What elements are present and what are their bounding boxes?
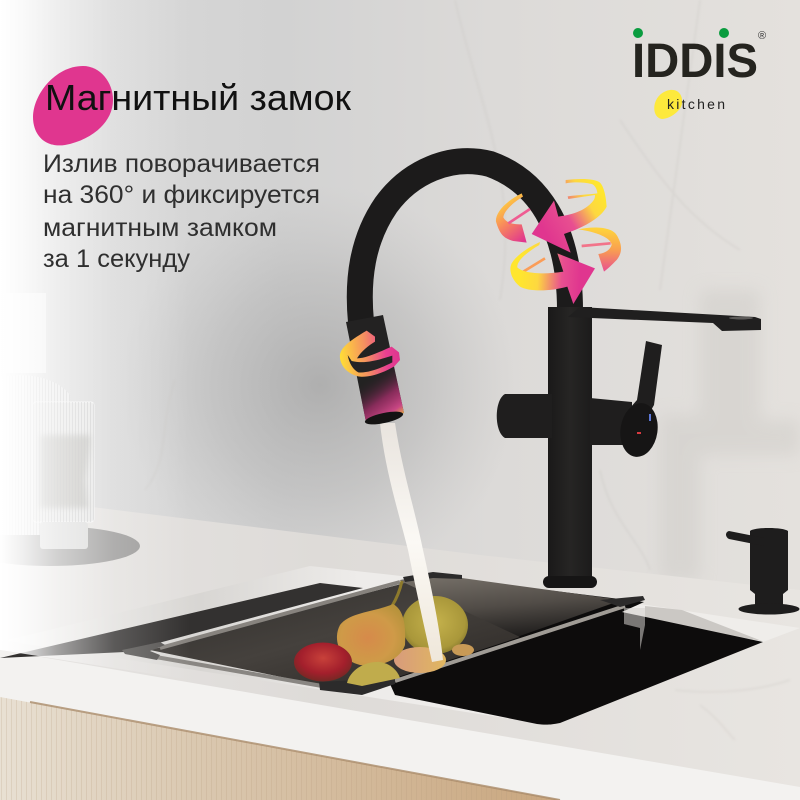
logo: IDDIS kitchen bbox=[632, 28, 766, 119]
sink bbox=[0, 566, 800, 725]
glass bbox=[33, 402, 94, 549]
arrow: left back ribbon bbox=[496, 193, 530, 243]
description text: на 360° и фиксируется bbox=[43, 181, 320, 209]
metal corner highlight bbox=[624, 608, 645, 650]
blush pear bbox=[394, 647, 446, 673]
red pear bbox=[337, 604, 405, 666]
description text: за 1 секунду bbox=[43, 245, 190, 273]
nozzle ribbon icon bbox=[340, 331, 400, 377]
placemat bbox=[0, 526, 140, 566]
carafe and glass bbox=[0, 293, 140, 566]
left white fade bbox=[0, 0, 190, 680]
apple bbox=[294, 642, 352, 682]
right sink interior bbox=[390, 576, 763, 725]
rim shadow bbox=[645, 606, 762, 641]
kitchen label: kitchen bbox=[667, 96, 725, 112]
nozzle bbox=[346, 315, 404, 427]
column bbox=[548, 307, 592, 577]
arrow: top pointing left bbox=[532, 179, 607, 253]
left cylinder bbox=[497, 394, 552, 438]
carafe bbox=[0, 293, 70, 535]
logo wordmark: IDDIS bbox=[632, 35, 758, 88]
arrow: bottom pointing right bbox=[510, 242, 595, 304]
small pear bbox=[452, 644, 474, 656]
yellow pear back bbox=[402, 596, 468, 654]
faucet bbox=[346, 161, 761, 588]
colander rim bbox=[150, 582, 625, 686]
top arm bbox=[568, 307, 761, 331]
soap dispenser bbox=[726, 528, 800, 614]
fruit bbox=[294, 581, 474, 686]
heading blob bbox=[33, 66, 113, 145]
water stream bbox=[380, 423, 443, 662]
colander handles bbox=[122, 572, 645, 695]
countertop bbox=[0, 496, 800, 800]
description text bbox=[43, 150, 320, 273]
knob bbox=[617, 401, 661, 459]
description text: Излив поворачивается bbox=[43, 150, 320, 178]
left sink interior bbox=[0, 583, 363, 658]
lever handle bbox=[630, 341, 662, 412]
sink back wall bbox=[400, 574, 622, 650]
logo dots bbox=[633, 28, 729, 38]
base bbox=[543, 576, 597, 588]
rotation arrows bbox=[496, 179, 621, 304]
stem bbox=[392, 581, 402, 606]
title: Магнитный замок bbox=[45, 77, 351, 118]
flexible spout bbox=[360, 161, 570, 322]
wood cabinet front bbox=[0, 697, 560, 800]
right cylinder bbox=[590, 398, 632, 445]
kitchen blob bbox=[654, 90, 682, 119]
arrow: right back ribbon bbox=[578, 227, 621, 272]
sink rim bbox=[0, 566, 800, 723]
registered mark: ® bbox=[758, 30, 766, 42]
description text: магнитным замком bbox=[43, 214, 277, 242]
colander inner bbox=[150, 583, 520, 685]
yellow pear front bbox=[347, 662, 400, 686]
